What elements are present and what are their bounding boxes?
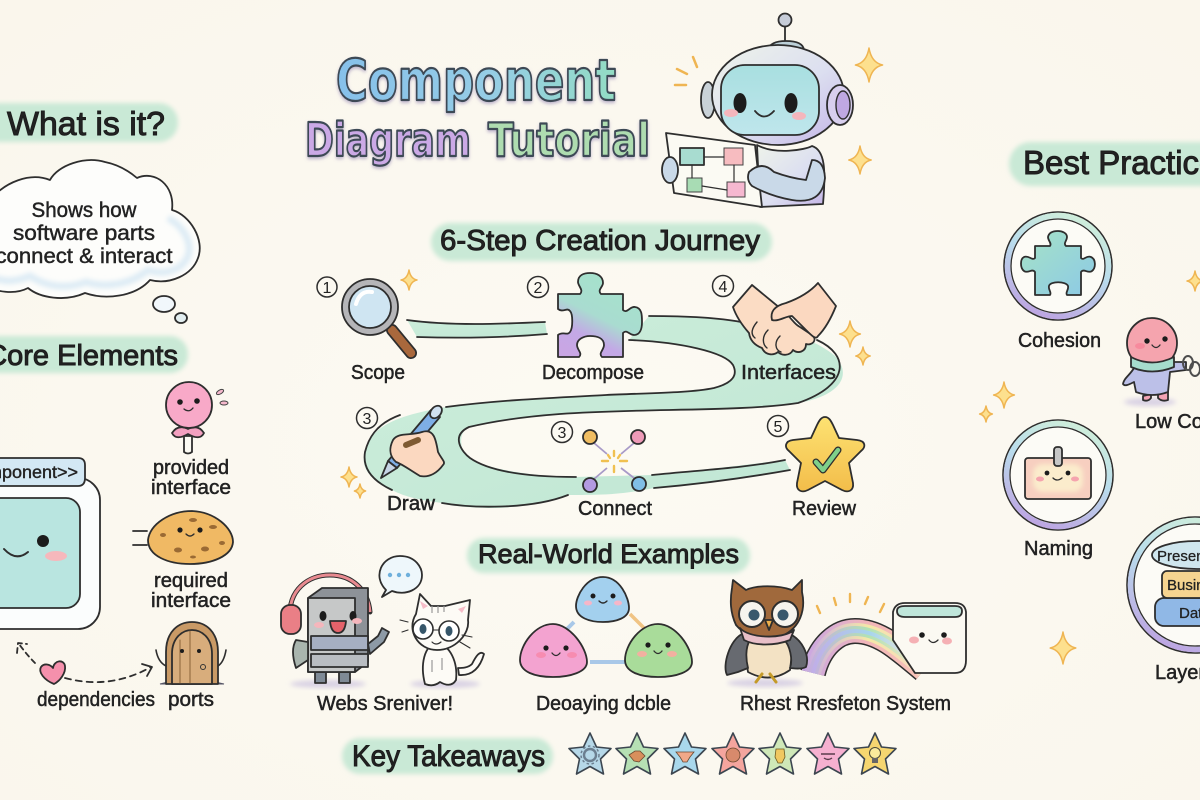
takeaway star badges bbox=[569, 733, 896, 774]
title bbox=[305, 48, 650, 167]
icon: speech bubble bbox=[379, 556, 422, 597]
ring icon with layered stack bbox=[1127, 517, 1200, 653]
label: Interfaces: Interfaces bbox=[741, 362, 836, 384]
label: Draw: Draw bbox=[387, 493, 436, 515]
icon: sparkle bbox=[980, 406, 992, 422]
label: Rhest Rresfeton System: Rhest Rresfeton System bbox=[740, 693, 951, 715]
star: face bbox=[807, 733, 849, 774]
star: bulb bbox=[854, 733, 896, 774]
title: Tutorial bbox=[488, 113, 650, 167]
label: Decompose: Decompose bbox=[542, 362, 644, 384]
label: Naming: Naming bbox=[1024, 538, 1093, 560]
arrows: dependencies bbox=[17, 643, 152, 682]
ring icon with puzzle piece bbox=[1004, 212, 1112, 320]
example: cat with glasses bbox=[400, 594, 484, 688]
label: required interface: interface bbox=[151, 590, 231, 612]
icon: star with check bbox=[786, 417, 864, 491]
star: bridge bbox=[664, 733, 706, 774]
practice: Cohesion bbox=[1004, 212, 1112, 352]
heading: Real-World Examples: Real-World Examples bbox=[478, 539, 739, 569]
icon: required interface cookie bbox=[133, 511, 233, 564]
label: required interface: required bbox=[154, 570, 228, 592]
step 5: Review bbox=[768, 416, 864, 520]
icon: sparkle bbox=[1187, 271, 1200, 291]
label: Deoaying dcble: Deoaying dcble bbox=[536, 693, 671, 715]
star: handshake bbox=[616, 733, 658, 774]
step 4: Interfaces bbox=[712, 276, 836, 384]
label: required interface bbox=[151, 570, 231, 612]
heading: What is it?: What is it? bbox=[7, 105, 165, 142]
icon: character with chain bbox=[1123, 318, 1200, 406]
step number 3: 3 bbox=[363, 411, 372, 428]
icon: heart bbox=[40, 661, 65, 684]
star: shake bbox=[712, 733, 754, 774]
title: Diagram bbox=[305, 113, 471, 167]
title: Component bbox=[336, 48, 616, 114]
cloud text: Shows how bbox=[32, 199, 137, 222]
practice: Naming bbox=[1003, 420, 1113, 560]
icon: sparkle bbox=[354, 484, 366, 498]
panel: thought cloud bbox=[0, 160, 200, 323]
example: server robot with headphones bbox=[281, 575, 389, 688]
icon: robot mascot holding diagram bbox=[662, 14, 853, 207]
label: Webs Sreniver!: Webs Sreniver! bbox=[317, 693, 453, 715]
step 1: Scope bbox=[317, 277, 411, 384]
icon: sparkle bbox=[401, 270, 417, 290]
label: provided interface: provided bbox=[153, 457, 229, 479]
icon: magnifying glass bbox=[342, 279, 411, 353]
icon: sparkle bbox=[840, 321, 860, 347]
practice: Low Coupling bbox=[1123, 318, 1200, 433]
example: owl with glasses bbox=[725, 580, 807, 687]
icon: provided interface lollipop bbox=[166, 382, 228, 454]
cloud text: software parts bbox=[13, 222, 155, 245]
step number 4: 4 bbox=[719, 279, 728, 296]
heading: Key Takeaways: Key Takeaways bbox=[352, 740, 545, 773]
icon: puzzle piece bbox=[558, 273, 642, 357]
label: Scope: Scope bbox=[351, 362, 405, 384]
example: rainbow bridge and marshmallow box bbox=[813, 594, 966, 673]
chart: winding journey path bbox=[364, 316, 843, 508]
icon: sparkle bbox=[849, 146, 871, 174]
step number 5: 5 bbox=[774, 419, 783, 436]
icon: component box bbox=[0, 458, 100, 629]
step number 2: 2 bbox=[534, 280, 543, 297]
label: dependencies: dependencies bbox=[37, 689, 155, 711]
practice: Layers bbox=[1127, 517, 1200, 684]
step number 3: 3 bbox=[558, 425, 567, 442]
icon: sparkle bbox=[856, 347, 870, 365]
label: provided interface bbox=[151, 457, 231, 499]
step 2: Decompose bbox=[528, 273, 644, 384]
step 3: Connect bbox=[552, 422, 652, 520]
icon: sparkle bbox=[341, 467, 357, 487]
ring icon with name badge bbox=[1003, 420, 1113, 530]
cloud text: connect & interact bbox=[0, 245, 173, 268]
label: Cohesion: Cohesion bbox=[1018, 330, 1101, 352]
example: three connected blobs bbox=[520, 577, 692, 677]
cloud text bbox=[0, 199, 173, 268]
star: lamp bbox=[759, 733, 801, 774]
icon: connected nodes bbox=[583, 430, 646, 492]
label: Review: Review bbox=[792, 498, 857, 520]
icon: sparkle bbox=[1050, 632, 1076, 664]
step 3: Draw bbox=[356, 403, 444, 515]
label: ports: ports bbox=[168, 689, 214, 711]
heading: 6-Step Creation Journey: 6-Step Creation Journey bbox=[440, 225, 761, 257]
star: gear bbox=[569, 733, 611, 774]
label: Connect: Connect bbox=[578, 498, 652, 520]
step number 1: 1 bbox=[323, 280, 332, 297]
diagram sheet bbox=[666, 133, 762, 207]
icon: sparkle bbox=[994, 382, 1014, 408]
icon: hand with pen bbox=[381, 403, 444, 478]
icon: sparkle bbox=[855, 48, 883, 82]
label: provided interface: interface bbox=[151, 477, 231, 499]
icon: port door bbox=[156, 622, 226, 684]
icon: handshake bbox=[733, 283, 836, 355]
